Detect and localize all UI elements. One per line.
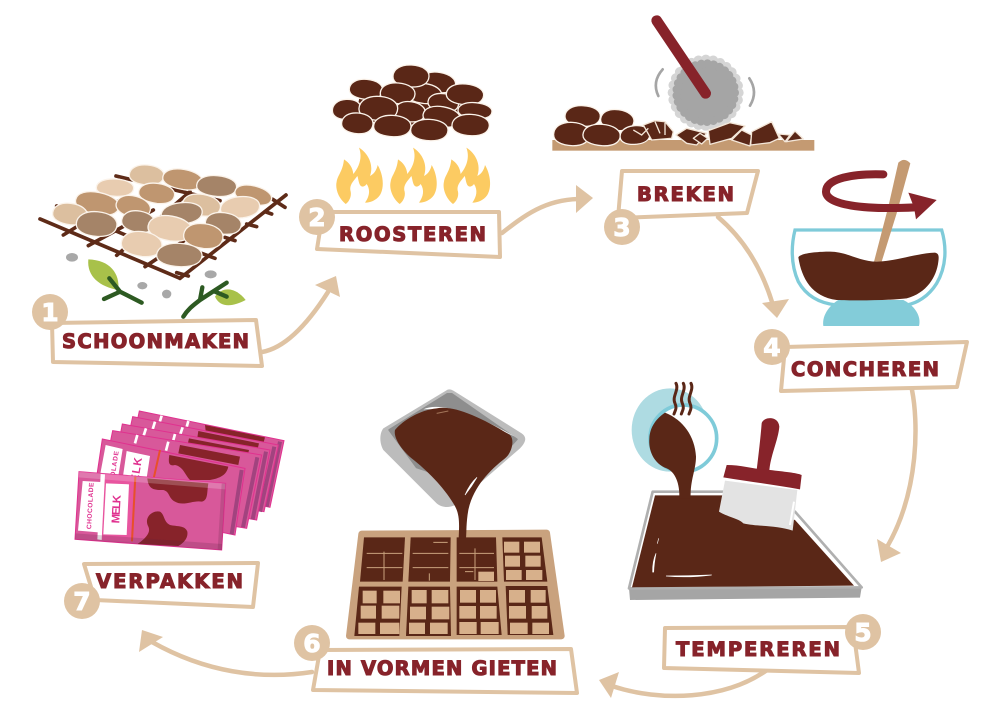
arrow: step 5 to 6 <box>599 670 767 698</box>
label: step 6 in vormen gieten: 6 <box>303 629 321 658</box>
label: step 5 tempereren: TEMPEREREN <box>676 638 840 661</box>
label: step 1 schoonmaken: SCHOONMAKEN <box>62 330 249 353</box>
arrow: step 3 to 4 <box>718 217 789 318</box>
pouring bowl <box>632 388 717 472</box>
arrow: step 6 to 7 <box>139 630 312 675</box>
icon: cracking wheel breaking beans <box>552 21 814 151</box>
label: step 2 roosteren <box>299 199 500 257</box>
label: step 1 schoonmaken <box>32 294 262 366</box>
cracking wheel <box>656 21 754 126</box>
label: step 5 tempereren <box>664 614 881 673</box>
label: step 4 concheren: CONCHEREN <box>791 358 939 381</box>
chocolate pour <box>649 413 696 498</box>
icon: conching bowl with spoon <box>792 160 945 326</box>
stacked back wrappers <box>98 411 284 528</box>
label: step 3 breken: 3 <box>613 213 631 242</box>
label: step 3 breken <box>604 171 758 245</box>
label: step 2 roosteren: ROOSTEREN <box>339 223 486 246</box>
icon: tempering on slab with scraper <box>629 383 862 600</box>
flames <box>336 148 490 204</box>
beans and shards <box>553 105 803 147</box>
right twig with leaf <box>183 283 246 317</box>
wrapper text chocolade: CHOCOLADE <box>86 482 96 529</box>
left twig with leaf <box>88 259 142 303</box>
icon: cleaning beans on sieve with twigs and stones <box>40 164 286 317</box>
roasted beans pile <box>332 64 493 142</box>
icon: packaged chocolate bars <box>75 411 284 550</box>
arrow: step 4 to 5 <box>877 390 916 562</box>
sieve net <box>40 176 286 278</box>
icon: roasting beans over flames <box>332 64 493 204</box>
label: step 6 in vormen gieten <box>294 625 577 693</box>
wrapper text melk front: MELK <box>110 494 124 524</box>
label: step 5 tempereren: 5 <box>854 618 872 647</box>
chocolate pour <box>395 408 512 538</box>
label: step 4 concheren: 4 <box>763 333 781 362</box>
stirring arrow <box>826 174 937 219</box>
mould tray <box>349 533 561 636</box>
label: step 7 verpakken: VERPAKKEN <box>96 570 243 593</box>
pan <box>380 389 525 507</box>
label: step 1 schoonmaken: 1 <box>41 298 59 327</box>
label: step 7 verpakken: 7 <box>73 587 91 616</box>
label: step 6 in vormen gieten: IN VORMEN GIETEN <box>327 657 557 680</box>
liquid chocolate <box>798 252 939 300</box>
arrow: step 2 to 3 <box>502 185 593 233</box>
empty chocolate squares <box>358 542 549 634</box>
divider highlights <box>367 542 494 581</box>
wrapper text: CHOCOLADE <box>106 450 121 499</box>
label: step 4 concheren <box>754 329 967 391</box>
icon: pouring chocolate into bar moulds <box>349 389 561 636</box>
scraper <box>719 418 802 531</box>
wrapper text melk: MELK <box>128 456 145 493</box>
second wrapper <box>92 439 245 535</box>
marble slab tray <box>629 492 862 600</box>
bowl stand <box>823 300 920 326</box>
label: step 7 verpakken <box>64 563 258 619</box>
label: step 2 roosteren: 2 <box>308 203 326 232</box>
mould cells <box>354 537 553 636</box>
stones <box>66 253 217 298</box>
steam <box>674 383 692 414</box>
front wrapper <box>75 472 226 550</box>
label: step 3 breken: BREKEN <box>637 183 734 206</box>
board <box>552 140 814 151</box>
arrow: step 1 to 2 <box>262 276 340 352</box>
spoon <box>874 160 910 262</box>
bowl <box>792 230 945 305</box>
raw cocoa beans <box>51 164 274 268</box>
